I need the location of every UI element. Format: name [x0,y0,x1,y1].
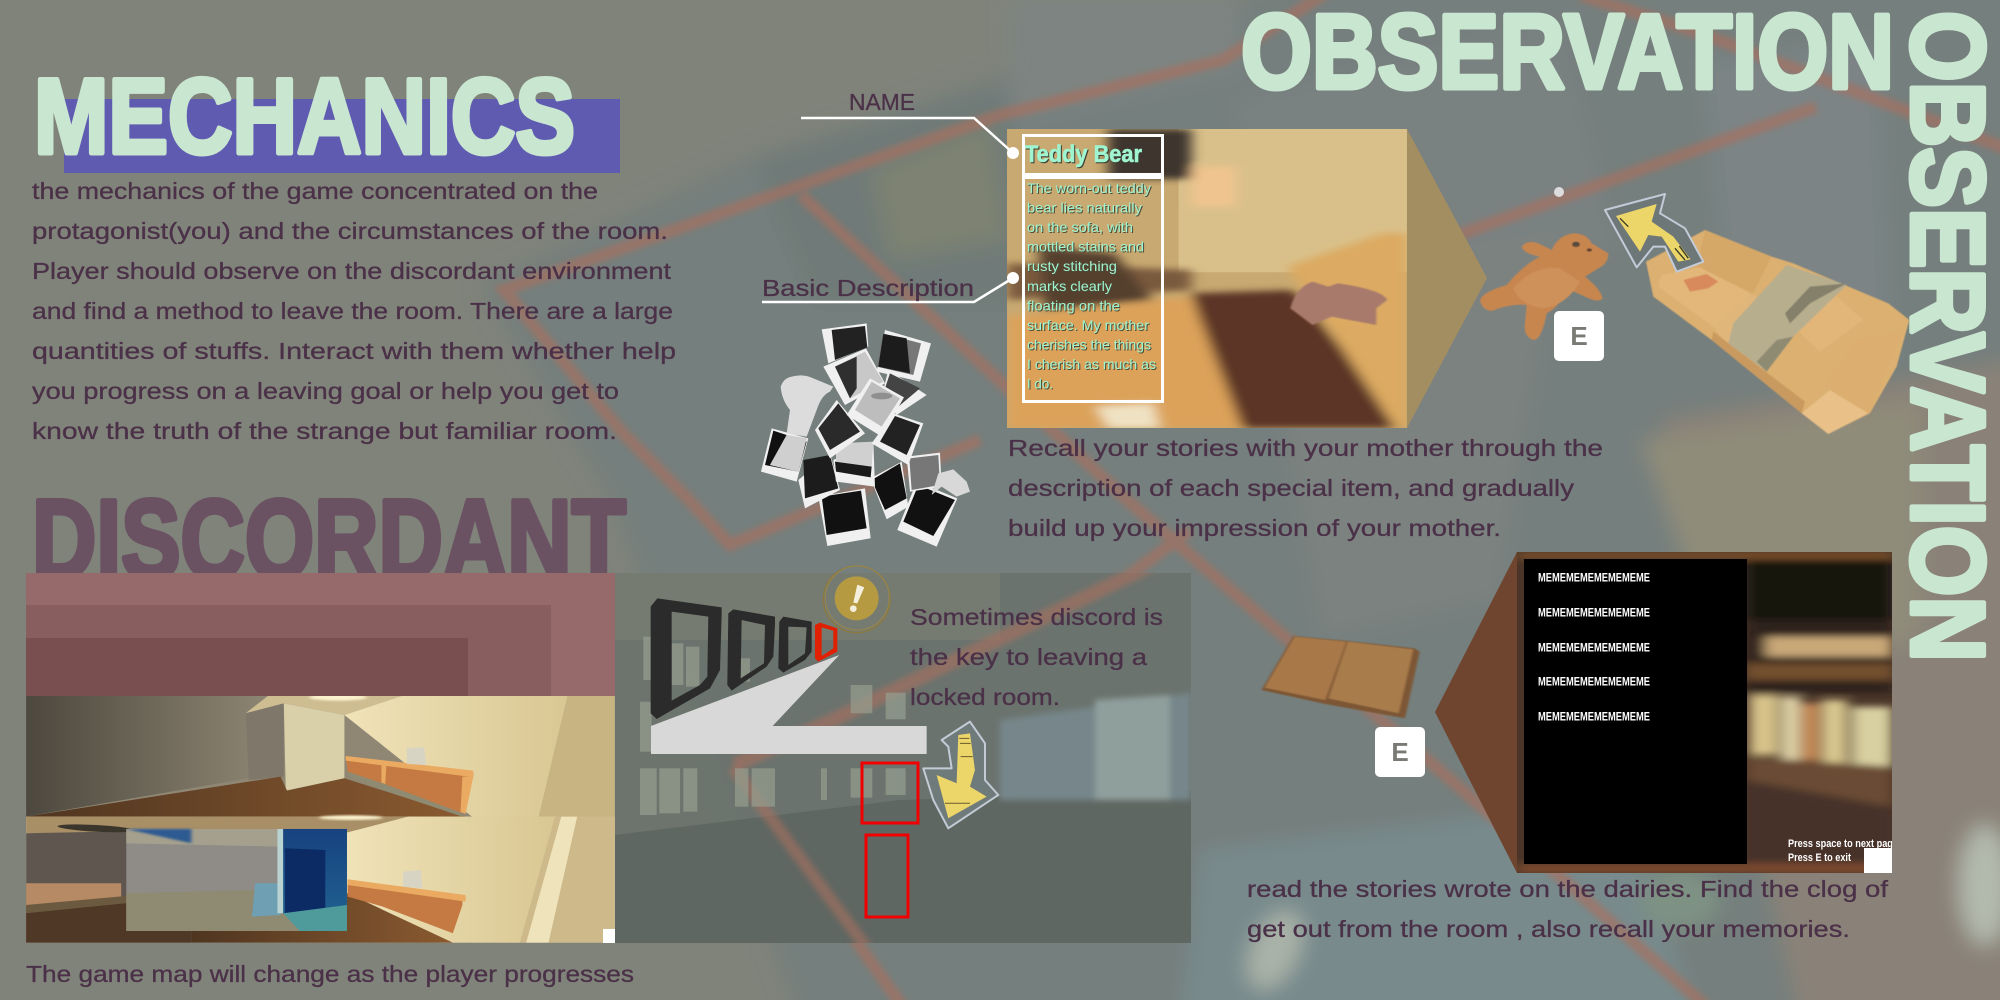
diary page black sheet: MEMEMEMEMEMEMEME [1538,710,1650,724]
item: sofa 3D model [1646,230,1909,434]
item description box: mottled stains and [1027,238,1144,254]
illustration: torn polaroid collage [761,323,970,547]
text block: recall stories: build up your impression of your mother. [1008,515,1501,541]
item description box: marks clearly [1027,278,1112,294]
item: open diary book [1261,636,1420,718]
item description box: surface. My mother [1027,317,1149,333]
key prompt: E for teddy bear [1554,311,1604,361]
callout: Basic Description label: Basic Description [762,275,974,301]
item description box [1024,178,1162,402]
item description box: bear lies naturally [1027,200,1142,216]
icon: shrinking door gauge [651,598,927,754]
icon: yellow arrow pointing up-left [1605,194,1703,272]
text block: discord hint: locked room. [910,684,1060,710]
screenshot: room before change [26,694,615,817]
diary page black sheet: MEMEMEMEMEMEMEME [1538,640,1650,654]
text block: recall stories: description of each special item, and gradually [1008,475,1575,501]
text block: diary stories: read the stories wrote on the dairies. Find the clog of [1247,876,1889,902]
zoom wedge [1407,129,1487,428]
text block: discord hint [910,604,1163,710]
callout: NAME label: NAME [849,89,915,115]
white corner tab [1864,848,1892,873]
text block: mechanics description: and find a method to leave the room. There are a large [32,298,673,324]
text block: mechanics description [32,178,676,444]
diary page black sheet: MEMEMEMEMEMEMEME [1538,570,1650,584]
panel: stepped pink blocks [26,573,615,696]
panel: game map screenshots [26,694,615,943]
text block: discord hint: Sometimes discord is [910,604,1163,630]
zoom wedge [1435,552,1517,873]
icon: exclamation badge [823,566,890,633]
item description box: on the sofa, with [1027,219,1133,235]
overlay: blue door inset [126,829,347,931]
text block: diary stories: get out from the room , also recall your memories. [1247,916,1850,942]
red marker rectangle: upper [862,763,918,823]
callout: Basic Description label [762,272,1019,302]
text block: mechanics description: you progress on a leaving goal or help you get to [32,378,619,404]
item: teddy bear 3D model [1480,233,1608,340]
key prompt: E for teddy bear: E [1570,321,1588,351]
text block: mechanics description: quantities of stuffs. Interact with them whether help [32,338,676,364]
caption: game map: The game map will change as the player progresses [26,961,634,987]
text block: recall stories [1008,435,1603,541]
panel: teddy bear item inspection [1007,129,1487,428]
text block: mechanics description: know the truth of the strange but familiar room. [32,418,617,444]
callout: NAME label [801,89,1019,159]
text block: mechanics description: Player should observe on the discordant environment [32,258,672,284]
text block: discord hint: the key to leaving a [910,644,1147,670]
accent bar behind MECHANICS heading [64,99,620,173]
item description box: I cherish as much as [1027,356,1156,372]
diary page black sheet: MEMEMEMEMEMEMEME [1538,606,1650,620]
diary page black sheet [1524,559,1747,864]
diary prompt text: Press E to exit [1788,852,1851,864]
photo edge tab [603,929,615,943]
diary prompt text [1788,840,1892,861]
item picture: small teddy bear [1290,282,1387,325]
item description box: The worn-out teddy [1027,180,1151,196]
heading: MECHANICS: MECHANICS [34,56,575,176]
heading: DISCORDANT: DISCORDANT [32,477,626,602]
key prompt: E for diary [1375,727,1425,777]
item description box: floating on the [1027,298,1120,314]
text block: mechanics description: the mechanics of the game concentrated on the [32,178,598,204]
item name box: Teddy Bear [1025,141,1142,168]
text block: mechanics description: protagonist(you) and the circumstances of the room. [32,218,668,244]
icon: yellow arrow pointing down [923,722,998,828]
item description box: cherishes the things [1027,336,1151,352]
text block: recall stories: Recall your stories with your mother through the [1008,435,1603,461]
text block: diary stories [1247,876,1889,942]
panel: in-game screenshot with health gauge [615,565,1191,943]
red marker rectangle: lower [866,835,908,917]
diary page black sheet: MEMEMEMEMEMEMEME [1538,674,1650,688]
diary prompt text: Press space to next page [1788,838,1898,850]
item name box [1024,136,1162,174]
panel: diary reading screen [1435,552,1898,874]
marker dot [1554,187,1564,197]
item description box: I do. [1027,376,1053,392]
screenshot: room after change [26,815,615,943]
key prompt: E for diary: E [1391,737,1409,767]
item description box: rusty stitching [1027,258,1117,274]
